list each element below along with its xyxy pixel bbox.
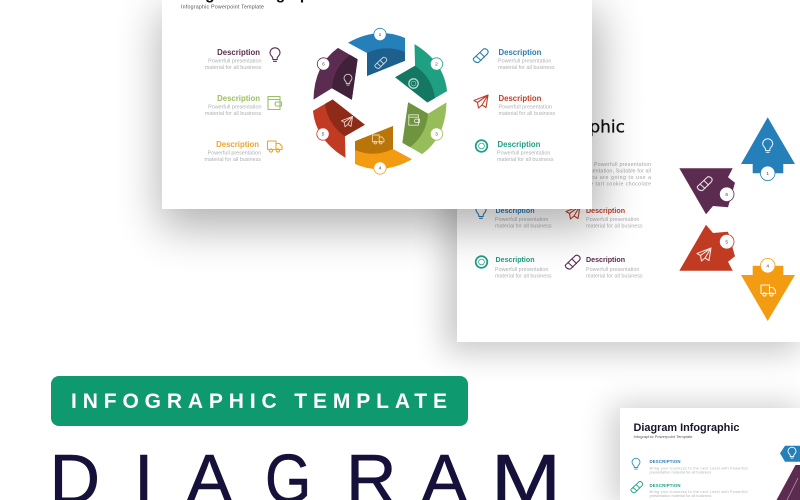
icon: paper plane [474, 95, 488, 108]
item: bulb description [476, 205, 552, 230]
item: red description: Powerfull presentation [498, 104, 552, 110]
item: pencil description: Powerfull presentation [586, 267, 639, 273]
front slide shadow [160, 10, 600, 228]
item: bulb description: Powerfull presentation [495, 217, 548, 223]
segment 3 green [389, 86, 455, 157]
list item 1: Bring your business to the next Level with Powerfull [650, 466, 748, 470]
item: green description: material for all business [205, 111, 262, 117]
main heading [50, 439, 561, 500]
cycle diagram: 4 [379, 166, 382, 172]
slide title: Diagram Infographic [634, 422, 739, 434]
triangle 5 red [679, 225, 735, 271]
justified intro text: if you are going to use a [582, 175, 651, 181]
item: bulb description: material for all business [495, 224, 552, 230]
item: blue description [498, 48, 555, 71]
icon: pencil [473, 49, 488, 63]
justified intro text: Powerfull presentation [594, 162, 651, 168]
triangle 6 purple: 6 [725, 192, 728, 198]
item: red description [498, 94, 555, 117]
segment 2 teal [386, 39, 451, 110]
list item 1: presentation material for all business [650, 470, 711, 474]
item: orange description: Powerfull presentation [208, 150, 261, 156]
cycle diagram: 5 [322, 132, 325, 138]
item: purple description: material for all business [205, 65, 262, 71]
triangle 5 red: 5 [725, 239, 728, 245]
panel: lower right slide [620, 408, 800, 500]
triangle 4 orange [741, 258, 795, 321]
triangle 1 blue [741, 117, 795, 181]
panel: front slide with cycle diagram [162, 0, 592, 209]
slide title fragment: Infographic [529, 118, 625, 138]
item: orange description: Description [216, 140, 259, 149]
hexagon tag blue [780, 446, 800, 462]
slide subtitle: Infographic Powerpoint Template [634, 434, 693, 439]
item: blue description: Description [498, 48, 542, 57]
item: pencil description: material for all business [586, 274, 643, 280]
item: gear description [476, 256, 552, 280]
segment 1 blue [348, 33, 405, 76]
item: orange description [204, 140, 261, 163]
badge: infographic template [51, 376, 468, 426]
icon: gear [476, 140, 487, 152]
justified intro text: sure tart cookie chocolate [582, 182, 651, 188]
cycle diagram: 6 [322, 62, 325, 68]
item: gear description: Description [496, 256, 535, 264]
list item 2 [631, 482, 748, 498]
item: purple description: Description [217, 48, 260, 57]
item: plane description: material for all business [586, 224, 643, 230]
item: plane description [566, 206, 643, 230]
item: teal description: material for all business [497, 157, 554, 163]
slide subtitle: Infographic Powerpoint Template [181, 4, 264, 10]
list item 1: DESCRIPTION [650, 459, 680, 464]
purple diagonal shape [776, 465, 800, 500]
cycle diagram: 2 [435, 62, 438, 68]
item: plane description: Description [586, 207, 625, 215]
item: purple description [205, 48, 262, 71]
justified intro text: presentation, Suitable for all [582, 168, 651, 174]
icon: wallet [268, 96, 282, 110]
item: blue description: Powerfull presentation [498, 58, 551, 64]
item: teal description: Description [498, 140, 541, 149]
back slide shadows [445, 130, 800, 500]
item: pencil description: Description [586, 256, 625, 264]
cycle diagram: 3 [435, 132, 438, 138]
list item 2: presentation material for all business [650, 494, 711, 498]
triangle 1 blue: 1 [766, 171, 769, 177]
segment 4 orange [355, 126, 412, 169]
cycle diagram [305, 28, 455, 174]
list item 1 [632, 458, 748, 474]
list item 2: DESCRIPTION [650, 483, 680, 488]
item: green description: Description [217, 94, 260, 103]
item: pencil description [565, 255, 643, 280]
panel: back slide with triangle diagram [457, 100, 800, 342]
list item 2: Bring your business to the next Level with Powerfull [650, 490, 748, 494]
item: gear description: material for all business [495, 274, 552, 280]
item: plane description: Powerfull presentation [586, 217, 639, 223]
segment 6 purple [305, 45, 371, 116]
segment 5 red [309, 92, 374, 163]
number badges [317, 28, 443, 174]
item: red description: material for all business [498, 111, 555, 117]
cycle diagram: 1 [379, 32, 382, 38]
item: teal description: Powerfull presentation [497, 150, 550, 156]
icon: truck [268, 141, 282, 152]
item: green description [205, 94, 262, 117]
item: bulb description: Description [496, 207, 535, 215]
item: purple description: Powerfull presentation [208, 58, 262, 64]
item: orange description: material for all business [204, 157, 261, 163]
triangle 6 purple [679, 168, 735, 214]
item: red description: Description [498, 94, 542, 103]
item: gear description: Powerfull presentation [495, 267, 548, 273]
item: teal description [497, 140, 554, 163]
item: blue description: material for all business [498, 65, 555, 71]
badge: infographic template: INFOGRAPHIC TEMPLATE [71, 390, 447, 413]
item: green description: Powerfull presentation [208, 104, 262, 110]
segment icons [375, 57, 387, 68]
justified intro text [582, 162, 651, 188]
icon: bulb [270, 48, 280, 61]
triangle 4 orange: 4 [766, 263, 769, 269]
